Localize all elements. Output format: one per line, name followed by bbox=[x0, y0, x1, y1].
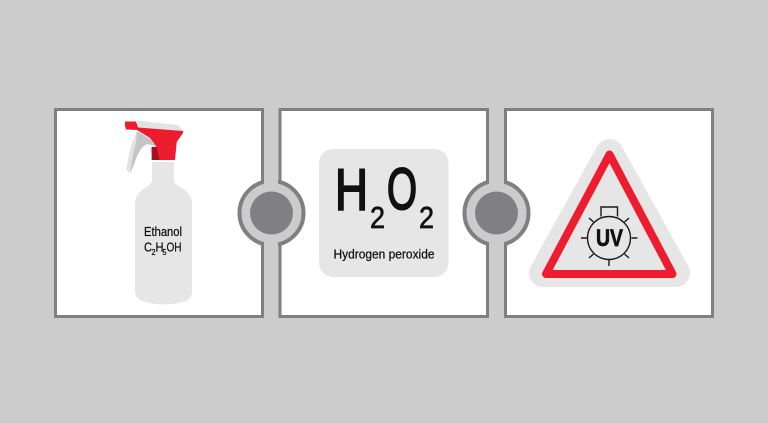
panel: UV warning bbox=[506, 110, 712, 316]
label: C2H5OH formula bbox=[144, 240, 182, 257]
formula: H2O2: 2 bbox=[419, 200, 434, 235]
label: C2H5OH formula: OH bbox=[166, 240, 182, 254]
formula: H2O2: H bbox=[335, 158, 368, 222]
formula: H2O2: O bbox=[387, 157, 417, 222]
connector: left bbox=[240, 170, 304, 256]
icon: spray bottle bbox=[125, 120, 192, 304]
formula: H2O2: 2 bbox=[370, 200, 385, 235]
label: Ethanol: Ethanol bbox=[144, 224, 182, 239]
icon: UV warning triangle bbox=[543, 153, 676, 274]
label: C2H5OH formula: 2 bbox=[152, 248, 156, 257]
label: UV: UV bbox=[596, 225, 623, 252]
label: Hydrogen peroxide: Hydrogen peroxide bbox=[334, 246, 434, 262]
connector: right bbox=[464, 170, 528, 256]
label: C2H5OH formula: H bbox=[156, 240, 164, 254]
card: H2O2 formula bbox=[319, 149, 448, 277]
panel: ethanol spray bottle bbox=[56, 110, 262, 316]
formula: H2O2 bbox=[335, 157, 434, 235]
label: C2H5OH formula: 5 bbox=[162, 248, 167, 257]
panel: hydrogen peroxide bbox=[280, 110, 488, 316]
label: C2H5OH formula: C bbox=[144, 240, 152, 254]
